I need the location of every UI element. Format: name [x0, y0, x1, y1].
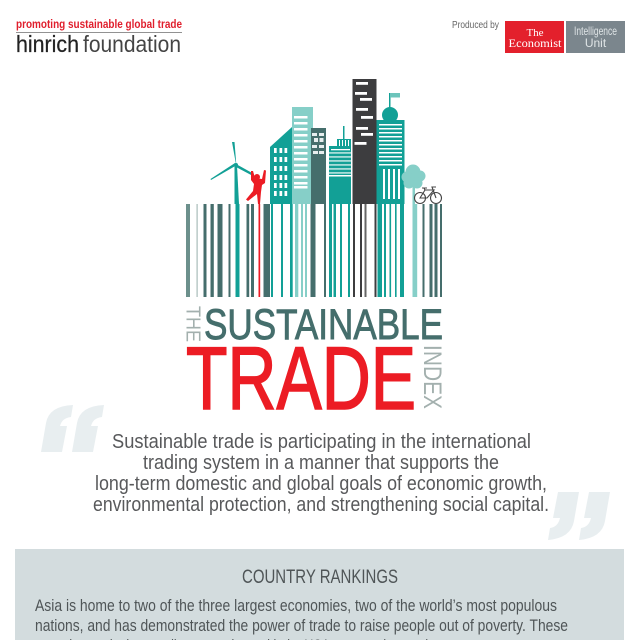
building: teal mid-rise with antenna [329, 126, 351, 204]
text: rankings introduction: Asia is home to two of the three largest economies, two of the world’s most populous [35, 597, 557, 615]
building: domed teal tower with flag [376, 93, 404, 204]
logo: produced by The Economist Intelligence Unit: Economist [508, 36, 562, 50]
icon: tree [402, 164, 426, 204]
title: The Sustainable Trade Index: THE [182, 306, 204, 342]
illustration: city skyline [210, 79, 442, 204]
icon: closing quotation mark [548, 492, 610, 540]
title: The Sustainable Trade Index: TRADE [186, 328, 416, 428]
title: The Sustainable Trade Index: SUSTAINABLE [204, 301, 443, 349]
chart: barcode stripes [186, 204, 442, 297]
text: rankings introduction [35, 597, 568, 640]
building: angled teal tower [270, 127, 292, 204]
logo: produced by The Economist Intelligence Unit: The [526, 27, 544, 39]
text: sustainable trade definition: environmental protection, and strengthening social capital. [93, 494, 549, 516]
building: light striped tower [292, 107, 313, 204]
text: sustainable trade definition: long-term domestic and global goals of economic growth, [95, 473, 547, 495]
building: charcoal skyscraper [352, 79, 376, 204]
heading: country rankings: COUNTRY RANKINGS [242, 567, 398, 588]
logo: produced by The Economist Intelligence Unit [452, 19, 625, 53]
logo: Hinrich Foundation: hinrich [16, 31, 79, 57]
building: dark teal tower [311, 128, 326, 204]
logo: produced by The Economist Intelligence Unit: Intelligence [574, 24, 617, 38]
logo: Hinrich Foundation [16, 19, 182, 57]
title: The Sustainable Trade Index: INDEX [418, 345, 446, 409]
text: sustainable trade definition [93, 431, 549, 516]
text: sustainable trade definition: Sustainable trade is participating in the international [112, 431, 531, 453]
icon: wind turbine [210, 142, 254, 204]
icon: red figure [246, 170, 266, 204]
logo: Hinrich Foundation: promoting sustainable global trade [16, 19, 182, 31]
text: sustainable trade definition: trading system in a manner that supports the [143, 452, 499, 474]
icon: bicycle [414, 187, 442, 204]
panel: country rankings [15, 549, 624, 640]
logo: Hinrich Foundation: foundation [83, 31, 181, 57]
icon: opening quotation mark [41, 405, 104, 452]
logo: produced by The Economist Intelligence Unit: Unit [585, 36, 607, 50]
title: The Sustainable Trade Index [182, 301, 446, 428]
logo: produced by The Economist Intelligence Unit: Produced by [452, 19, 500, 31]
